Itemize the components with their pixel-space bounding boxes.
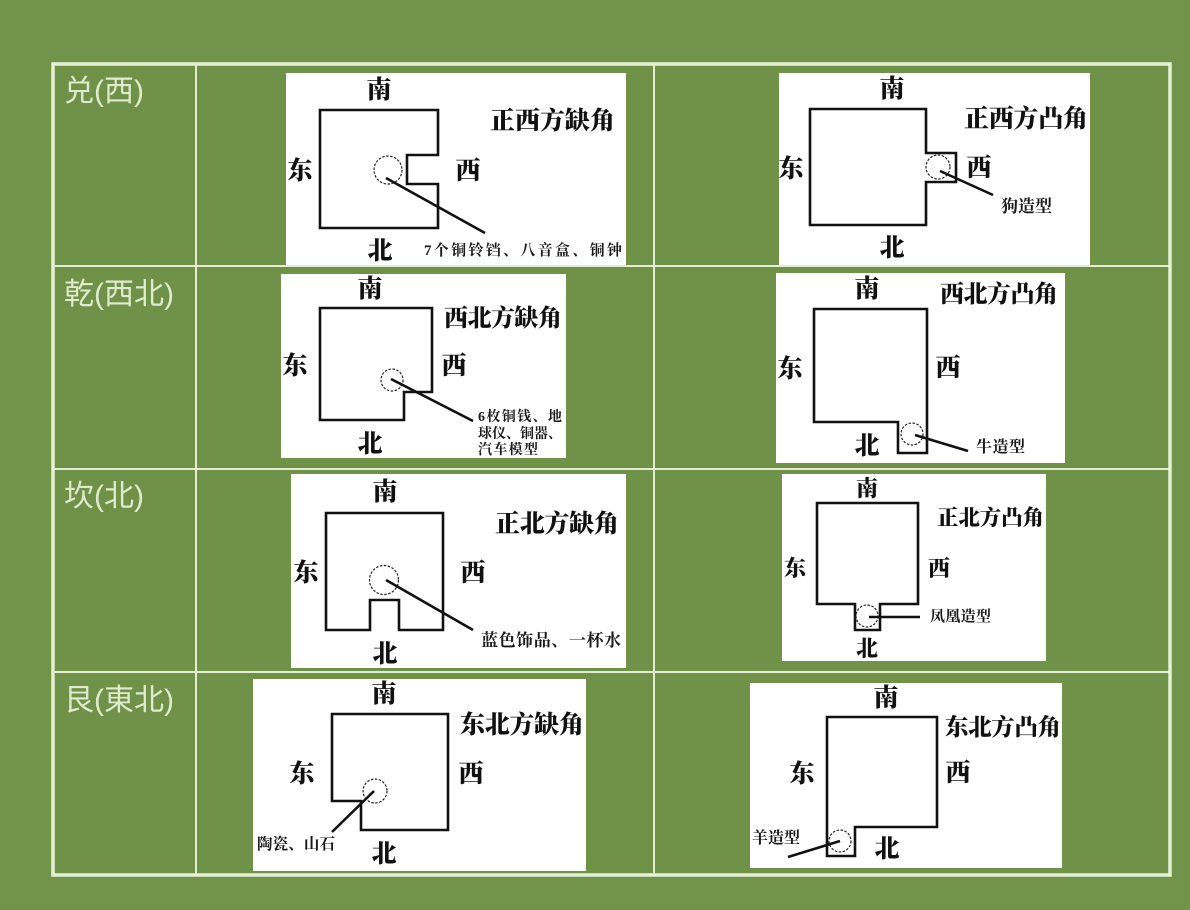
direction: east: 东 bbox=[784, 556, 808, 581]
direction: east: 东 bbox=[293, 558, 321, 587]
direction: south: 南 bbox=[372, 478, 398, 506]
dashed circle bbox=[926, 155, 950, 179]
direction: south: 南 bbox=[856, 476, 878, 501]
dashed circle bbox=[901, 423, 923, 445]
item label: 6枚铜钱、地 bbox=[478, 408, 562, 425]
direction: west: 西 bbox=[966, 154, 992, 182]
panel title: 正西方凸角 bbox=[964, 105, 1088, 133]
direction: south: 南 bbox=[879, 75, 905, 103]
panel title: 西北方凸角 bbox=[940, 281, 1058, 308]
house outline with north bump bbox=[817, 503, 918, 630]
house outline with west bump bbox=[810, 109, 956, 225]
direction: west: 西 bbox=[935, 354, 961, 382]
panel title: 西北方缺角 bbox=[444, 305, 562, 332]
pointer line bbox=[391, 379, 473, 421]
item label: 狗造型 bbox=[1001, 196, 1052, 216]
dashed circle bbox=[829, 830, 851, 852]
direction: west: 西 bbox=[455, 157, 481, 185]
pointer line bbox=[915, 435, 968, 451]
row label: 兑(西): 兑(西) bbox=[64, 75, 144, 108]
direction: west: 西 bbox=[458, 760, 484, 788]
direction: west: 西 bbox=[945, 759, 971, 787]
direction: north: 北 bbox=[874, 835, 900, 863]
house outline with northeast notch bbox=[332, 714, 448, 830]
panel: 正北方缺角 bbox=[291, 474, 626, 668]
direction: east: 东 bbox=[789, 759, 817, 788]
pointer line bbox=[386, 580, 473, 630]
direction: north: 北 bbox=[854, 432, 880, 460]
house outline with northeast bump bbox=[827, 717, 937, 856]
item label: 汽车模型 bbox=[478, 441, 538, 458]
panel: 西北方凸角 bbox=[776, 273, 1065, 463]
direction: west: 西 bbox=[928, 556, 950, 581]
house outline with west notch bbox=[320, 110, 438, 228]
item label: 球仪、铜器、 bbox=[478, 425, 562, 442]
dashed circle bbox=[370, 566, 398, 594]
dashed circle bbox=[363, 779, 387, 803]
direction: north: 北 bbox=[371, 840, 397, 868]
panel: 正北方凸角 bbox=[782, 474, 1046, 661]
panel: 西北方缺角 bbox=[281, 274, 566, 458]
panel: 正西方缺角 bbox=[286, 73, 626, 265]
direction: south: 南 bbox=[357, 275, 383, 303]
row label: 艮(東北): 艮(東北) bbox=[64, 684, 174, 717]
direction: west: 西 bbox=[441, 352, 467, 380]
dashed circle bbox=[374, 156, 402, 184]
direction: east: 东 bbox=[282, 351, 310, 380]
pointer line bbox=[869, 616, 920, 618]
pointer line bbox=[788, 841, 840, 857]
dashed circle bbox=[381, 369, 403, 391]
panel: 东北方凸角 bbox=[750, 683, 1062, 868]
direction: south: 南 bbox=[854, 275, 880, 303]
house outline with north notch bbox=[326, 513, 443, 630]
panel title: 正西方缺角 bbox=[490, 107, 615, 135]
dashed circle bbox=[856, 605, 878, 627]
panel: 正西方凸角 bbox=[778, 73, 1090, 265]
direction: south: 南 bbox=[873, 684, 899, 712]
pointer line bbox=[940, 171, 993, 195]
panel title: 东北方凸角 bbox=[945, 713, 1061, 741]
direction: north: 北 bbox=[367, 237, 393, 265]
pointer line bbox=[332, 791, 374, 832]
item label: 羊造型 bbox=[752, 828, 800, 847]
item label bbox=[478, 408, 562, 458]
row label: 乾(西北): 乾(西北) bbox=[64, 278, 174, 311]
direction: east: 东 bbox=[289, 759, 317, 788]
panel title: 东北方缺角 bbox=[460, 710, 584, 739]
direction: east: 东 bbox=[778, 154, 806, 183]
house outline with northwest notch bbox=[320, 308, 432, 420]
direction: east: 东 bbox=[287, 156, 315, 185]
panel title: 正北方缺角 bbox=[495, 510, 619, 538]
direction: south: 南 bbox=[371, 680, 397, 708]
item label: 牛造型 bbox=[976, 437, 1025, 456]
panel: 东北方缺角 bbox=[253, 679, 586, 871]
house outline with northwest bump bbox=[814, 309, 927, 453]
direction: north: 北 bbox=[372, 640, 398, 668]
item label: 蓝色饰品、一杯水 bbox=[481, 630, 621, 650]
direction: south: 南 bbox=[366, 76, 392, 104]
pointer line bbox=[386, 178, 485, 233]
item label: 凤凰造型 bbox=[930, 607, 991, 625]
item label: 陶瓷、山石 bbox=[257, 834, 335, 853]
item label: 7个铜铃铛、八音盒、铜钟 bbox=[424, 241, 622, 259]
row label: 坎(北): 坎(北) bbox=[64, 480, 144, 513]
direction: north: 北 bbox=[879, 234, 905, 262]
panel title: 正北方凸角 bbox=[937, 506, 1044, 530]
direction: north: 北 bbox=[856, 636, 878, 661]
direction: north: 北 bbox=[357, 430, 383, 458]
direction: east: 东 bbox=[777, 354, 805, 383]
direction: west: 西 bbox=[460, 559, 486, 587]
